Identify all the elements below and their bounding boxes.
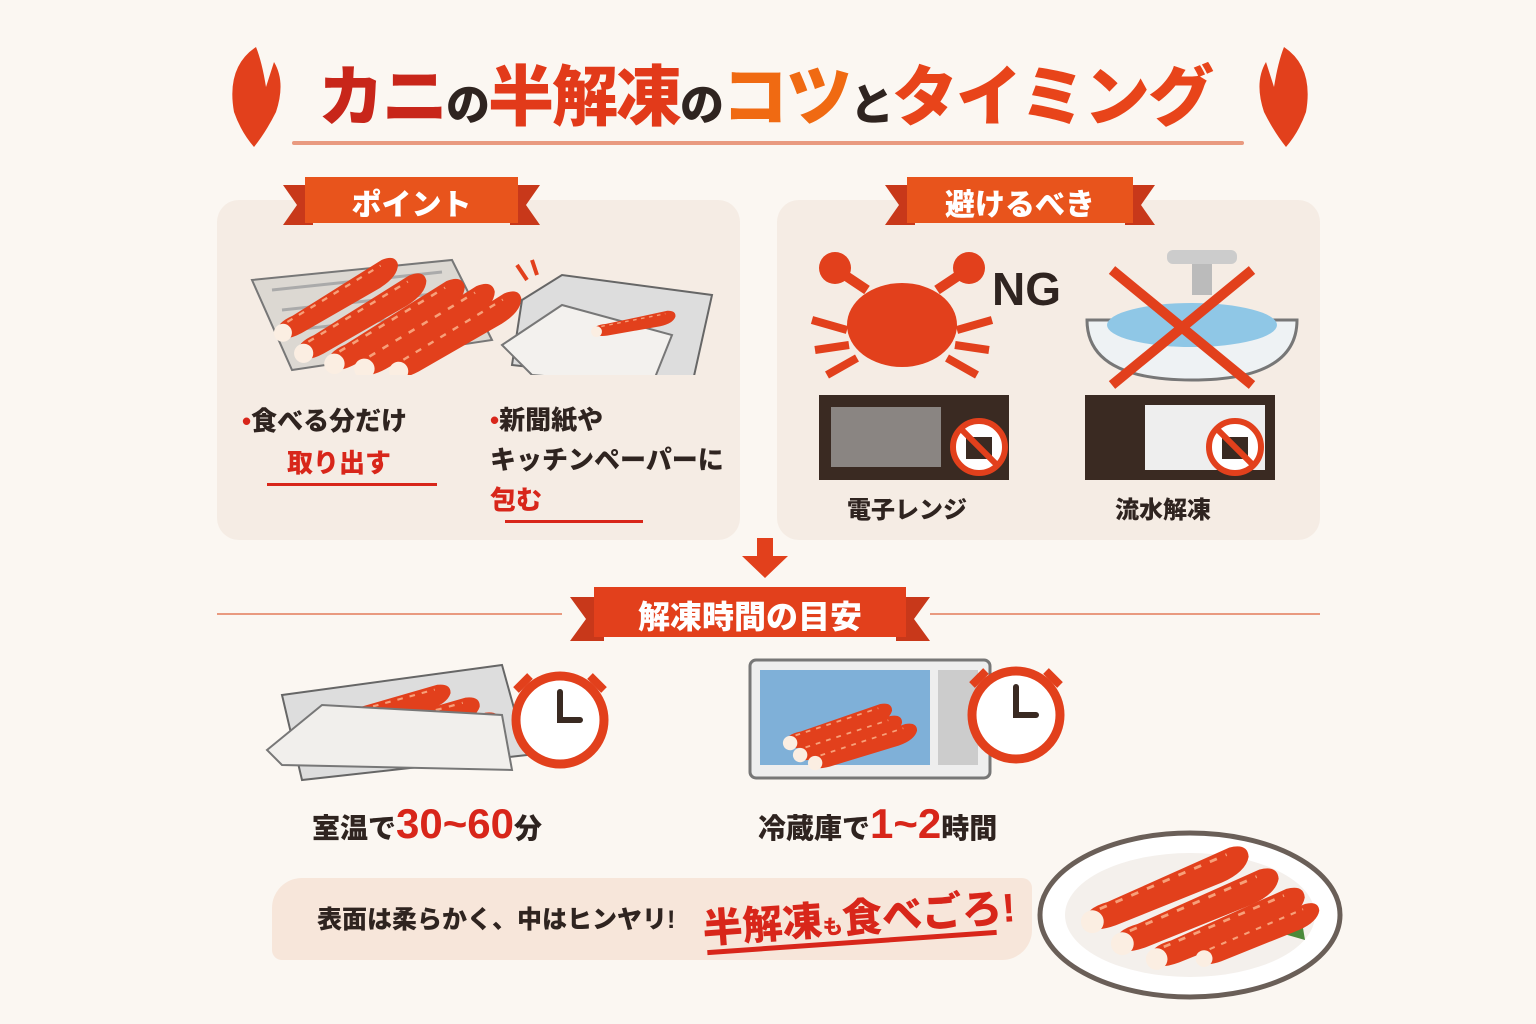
callout banner: 表面は柔らかく、中はヒンヤリ! (317, 906, 675, 934)
icon: running water thaw (1085, 395, 1275, 480)
icon: whole crab NG: NG (992, 263, 1061, 315)
arrow: down (742, 538, 788, 578)
text: take out (242, 406, 407, 478)
ribbon: point (283, 177, 540, 225)
icon: microwave (819, 395, 1009, 480)
icon: right claw (1259, 47, 1308, 147)
panel: avoid (777, 200, 1320, 540)
icon: whole crab NG (810, 252, 1061, 378)
ribbon: avoid: 避けるべき (945, 189, 1095, 222)
ribbon: avoid (885, 177, 1155, 225)
text: wrap (490, 405, 724, 515)
illustration: plate of crab (1038, 830, 1342, 1000)
title: カニの半解凍のコツとタイミング (318, 60, 1212, 134)
illustration: room temp wrapped crab (266, 664, 608, 782)
label: microwave: 電子レンジ (847, 497, 967, 524)
text: wrap: キッチンペーパーに (490, 445, 724, 475)
text: take out: 取り出す (287, 448, 391, 478)
text: take out: •食べる分だけ (242, 406, 407, 436)
text: wrap: 包む (490, 485, 542, 515)
icon: left claw (232, 47, 281, 147)
ribbon: thaw time (570, 587, 930, 641)
illustration: crab legs on newspaper (250, 258, 714, 375)
callout banner (272, 878, 1032, 960)
text: room temp: 室温で30~60分 (312, 800, 542, 847)
illustration: fridge (748, 658, 1064, 780)
label: running water: 流水解凍 (1115, 497, 1211, 524)
text: fridge: 冷蔵庫で1~2時間 (758, 800, 997, 847)
panel: point (217, 200, 740, 540)
ribbon: point: ポイント (352, 189, 472, 222)
text: wrap: •新聞紙や (490, 405, 603, 435)
icon: running water crossed (1086, 250, 1298, 389)
ribbon: thaw time: 解凍時間の目安 (638, 599, 862, 635)
callout banner: 半解凍も食べごろ! (701, 886, 1017, 952)
